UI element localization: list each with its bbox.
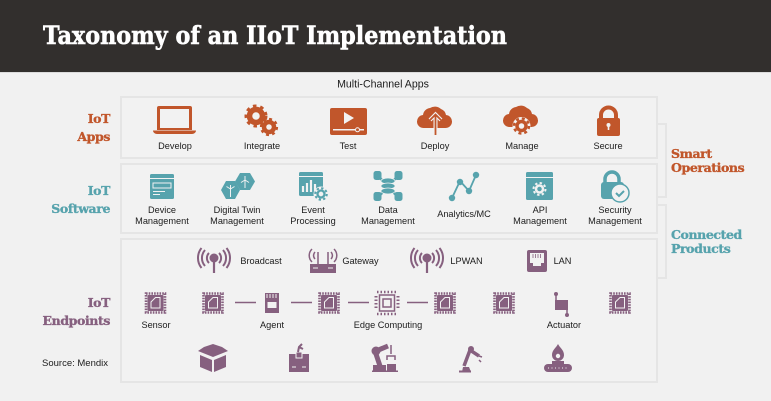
icon: chip — [436, 294, 454, 312]
label: data management: Data — [378, 205, 399, 215]
icon: cloud manage — [503, 106, 538, 135]
label: device management: Device — [148, 205, 176, 215]
label: actuator: Actuator — [547, 320, 581, 330]
icon: LPWAN — [411, 248, 443, 273]
icon: flame conveyor — [544, 344, 572, 372]
label: data management: Management — [361, 216, 415, 226]
label: edge computing: Edge Computing — [354, 320, 422, 330]
icon: data management — [374, 171, 402, 201]
label: IoT software: Software — [51, 201, 110, 216]
label: IoT software: IoT — [88, 183, 111, 198]
icon: digital twin — [221, 173, 255, 199]
label: API management: API — [533, 205, 547, 215]
label: broadcast: Broadcast — [240, 256, 282, 266]
icon: cloud deploy — [417, 107, 452, 135]
panel: IoT apps — [121, 97, 657, 158]
heading: multi-channel apps: Multi-Channel Apps — [337, 78, 429, 90]
icon: SD card agent — [265, 293, 279, 313]
label: security management: Security — [598, 205, 632, 215]
icon: chip — [494, 294, 514, 312]
label: event processing: Processing — [290, 216, 336, 226]
label: secure: Secure — [593, 141, 623, 151]
icon: security management — [601, 172, 629, 202]
icon: gateway router — [309, 249, 337, 273]
label: sensor: Sensor — [141, 320, 171, 330]
icon: laptop develop — [153, 106, 196, 134]
label: develop: Develop — [158, 141, 192, 151]
label: LPWAN: LPWAN — [450, 256, 483, 266]
label: connected products: Connected — [671, 227, 743, 242]
label: IoT endpoints: Endpoints — [43, 313, 110, 328]
label: device management: Management — [135, 216, 189, 226]
label: smart operations: Smart — [671, 146, 712, 161]
label: event processing: Event — [301, 205, 325, 215]
label: API management: Management — [513, 216, 567, 226]
source note: Source: Mendix — [42, 358, 108, 369]
icon: video test — [330, 108, 367, 135]
label: digital twin management: Management — [210, 216, 264, 226]
label: IoT endpoints: IoT — [88, 295, 111, 310]
icon: device management — [150, 174, 174, 199]
icon: LAN port — [527, 250, 547, 272]
icon: actuator — [554, 292, 569, 317]
label: deploy: Deploy — [421, 141, 450, 151]
label: IoT apps: Apps — [76, 129, 110, 144]
icon: sensor chip — [146, 294, 165, 312]
label: analytics: Analytics/MC — [437, 209, 491, 219]
label: smart operations: Operations — [671, 160, 745, 175]
connector lines — [235, 302, 428, 304]
icon: open box — [198, 344, 228, 372]
icon: gears integrate — [246, 106, 277, 135]
icon: robot assembly — [372, 345, 398, 372]
bracket: smart operations — [657, 124, 666, 197]
icon: analytics line — [449, 172, 479, 201]
label: integrate: Integrate — [244, 141, 280, 151]
bracket: connected products — [657, 205, 666, 278]
icon: padlock secure — [597, 108, 620, 136]
icon: edge processor — [376, 292, 398, 314]
panel: IoT endpoints — [121, 239, 657, 382]
label: gateway: Gateway — [342, 256, 379, 266]
label: LAN: LAN — [554, 256, 571, 266]
icon: event processing — [299, 172, 328, 202]
label: agent: Agent — [260, 320, 284, 330]
title: Taxonomy of an IIoT Implementation — [43, 21, 507, 50]
label: connected products: Products — [671, 241, 731, 256]
icon: chip — [204, 294, 222, 312]
label: security management: Management — [588, 216, 642, 226]
label: test: Test — [340, 141, 357, 151]
icon: API management — [526, 172, 553, 200]
label: IoT apps: IoT — [88, 111, 111, 126]
icon: broadcast — [198, 248, 230, 273]
panel: IoT software — [121, 164, 657, 233]
label: digital twin management: Digital Twin — [214, 205, 260, 215]
icon: robot arm — [459, 346, 482, 372]
label: manage: Manage — [505, 141, 539, 151]
header band — [0, 0, 771, 73]
icon: chip — [320, 294, 338, 312]
icon: factory package — [289, 344, 309, 372]
icon: chip — [610, 294, 630, 312]
